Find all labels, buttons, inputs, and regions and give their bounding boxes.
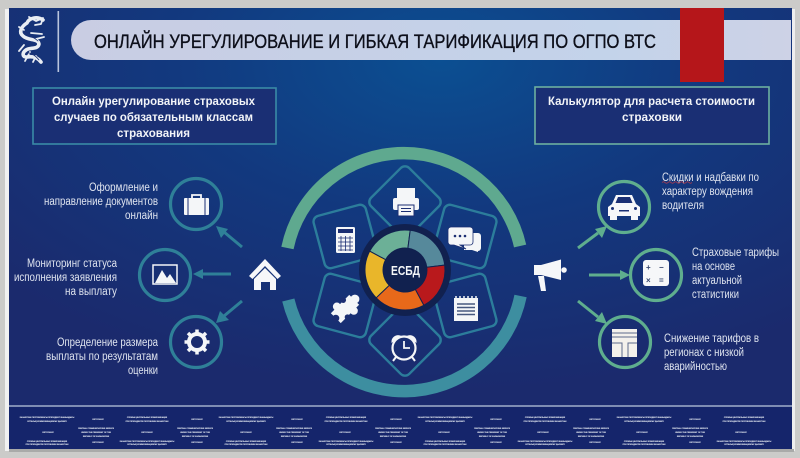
footer strip: ОРТАЛЫҚ КОММУНИКАЦИЯЛАР ҚЫЗМЕТІ: [425, 420, 465, 423]
heading box: left: страхования: [117, 126, 190, 140]
footer strip: ORTCOM.KZ: [191, 419, 204, 421]
text: monitoring: на выплату: [65, 286, 117, 298]
icon: arithmetic keypad: =: [659, 276, 664, 285]
footer strip: CENTRAL COMMUNICATIONS SERVICE: [672, 427, 709, 430]
heading box: left: [33, 88, 276, 144]
footer strip: REPUBLIC OF KAZAKHSTAN: [380, 435, 407, 438]
footer strip: REPUBLIC OF KAZAKHSTAN: [677, 435, 704, 438]
title bar: [71, 20, 791, 60]
footer strip: REPUBLIC OF KAZAKHSTAN: [479, 435, 506, 438]
footer strip: UNDER THE PRESIDENT OF THE: [81, 432, 112, 434]
text: regional reduction: регионах с низкой: [664, 347, 744, 359]
text: regional reduction: Снижение тарифов в: [664, 333, 759, 345]
footer strip: СЛУЖБА ЦЕНТРАЛЬНЫХ КОММУНИКАЦИЙ: [525, 416, 566, 419]
icon: briefcase: [170, 178, 222, 230]
footer strip: ПРИ ПРЕЗИДЕНТЕ РЕСПУБЛИКИ КАЗАХСТАН: [524, 420, 567, 423]
footer strip: CENTRAL COMMUNICATIONS SERVICE: [573, 427, 610, 430]
central donut: ЕСБД: [359, 224, 451, 316]
icon: arithmetic keypad: ×: [646, 276, 651, 285]
footer strip: ORTCOM.KZ: [537, 432, 550, 434]
footer strip: ORTCOM.KZ: [490, 419, 503, 421]
footer strip: ORTCOM.KZ: [735, 432, 748, 434]
footer strip: REPUBLIC OF KAZAKHSTAN: [578, 435, 605, 438]
footer strip: ORTCOM.KZ: [92, 419, 105, 421]
footer strip: ORTCOM.KZ: [191, 442, 204, 444]
footer strip: ORTCOM.KZ: [141, 432, 154, 434]
footer strip: СЛУЖБА ЦЕНТРАЛЬНЫХ КОММУНИКАЦИЙ: [624, 440, 665, 443]
footer strip: ORTCOM.KZ: [438, 432, 451, 434]
text: documents: направление документов: [44, 196, 158, 208]
petal diamonds: [312, 164, 498, 378]
text: discounts: характеру вождения: [662, 186, 753, 198]
arrow: house to picture: [193, 269, 231, 279]
footer strip: ПРИ ПРЕЗИДЕНТЕ РЕСПУБЛИКИ КАЗАХСТАН: [225, 443, 268, 446]
text: monitoring: [14, 258, 118, 298]
footer strip: СЛУЖБА ЦЕНТРАЛЬНЫХ КОММУНИКАЦИЙ: [226, 440, 267, 443]
footer strip: ОРТАЛЫҚ КОММУНИКАЦИЯЛАР ҚЫЗМЕТІ: [525, 443, 565, 446]
footer strip: ORTCOM.KZ: [689, 419, 702, 421]
footer strip: REPUBLIC OF KAZAKHSTAN: [83, 435, 110, 438]
text: documents: Оформление и: [89, 182, 158, 194]
text: tariffs: [692, 247, 779, 301]
footer strip: ПРИ ПРЕЗИДЕНТЕ РЕСПУБЛИКИ КАЗАХСТАН: [325, 420, 368, 423]
arrow: house to gear: [216, 301, 242, 323]
text: tariffs: актуальной: [692, 275, 742, 287]
text: payout amount: Определение размера: [57, 337, 159, 349]
footer strip: ORTCOM.KZ: [636, 432, 649, 434]
footer strip: UNDER THE PRESIDENT OF THE: [279, 432, 310, 434]
footer strip: СЛУЖБА ЦЕНТРАЛЬНЫХ КОММУНИКАЦИЙ: [127, 416, 168, 419]
logo: dragon emblem: [19, 17, 44, 62]
segment: slate: [408, 230, 445, 267]
heading box: right: [535, 87, 769, 144]
icon: house: [249, 259, 281, 290]
footer strip: ОРТАЛЫҚ КОММУНИКАЦИЯЛАР ҚЫЗМЕТІ: [624, 420, 664, 423]
footer strip: ПРИ ПРЕЗИДЕНТЕ РЕСПУБЛИКИ КАЗАХСТАН: [126, 420, 169, 423]
footer strip: ОРТАЛЫҚ КОММУНИКАЦИЯЛАР ҚЫЗМЕТІ: [27, 420, 67, 423]
text: documents: онлайн: [125, 210, 158, 222]
text: payout amount: выплаты по результатам: [46, 351, 158, 363]
footer strip: ОРТАЛЫҚ КОММУНИКАЦИЯЛАР ҚЫЗМЕТІ: [127, 443, 167, 446]
item: calculator tariffs: [630, 247, 779, 301]
icon: megaphone: [534, 260, 567, 291]
icon: chat bubbles: [448, 227, 481, 252]
footer strip: ORTCOM.KZ: [291, 419, 304, 421]
arrow: house to briefcase: [216, 226, 242, 247]
footer strip: ПРИ ПРЕЗИДЕНТЕ РЕСПУБЛИКИ КАЗАХСТАН: [723, 420, 766, 423]
item: briefcase: [44, 178, 222, 230]
arrow: megaphone to calculator: [589, 270, 630, 280]
footer strip: UNDER THE PRESIDENT OF THE: [378, 432, 409, 434]
text: discounts: водителя: [662, 200, 704, 212]
icon: puzzle piece: [325, 288, 366, 329]
footer strip: ORTCOM.KZ: [390, 442, 403, 444]
heading box: right: Калькулятор для расчета стоимости: [548, 94, 755, 108]
footer strip: CENTRAL COMMUNICATIONS SERVICE: [78, 427, 115, 430]
outer ring: bottom arc: [288, 296, 521, 391]
heading box: right: страховки: [622, 110, 682, 124]
footer strip: REPUBLIC OF KAZAKHSTAN: [182, 435, 209, 438]
footer strip: ORTCOM.KZ: [339, 432, 352, 434]
text: regional reduction: аварийностью: [664, 361, 727, 373]
item: car: [598, 172, 759, 232]
footer strip: UNDER THE PRESIDENT OF THE: [477, 432, 508, 434]
text: payout amount: [46, 337, 159, 377]
footer strip: КАЗАХСТАН РЕСПУБЛИКАСЫ ПРЕЗИДЕНТІ ЖАНЫНДАҒЫ: [219, 416, 273, 419]
icon: calculator: [336, 227, 355, 253]
icon: alarm clock: [392, 336, 416, 361]
icon: arithmetic keypad: [630, 250, 682, 300]
segment: orange: [376, 285, 424, 310]
icon: gear: [170, 316, 222, 368]
footer strip: КАЗАХСТАН РЕСПУБЛИКАСЫ ПРЕЗИДЕНТІ ЖАНЫНДАҒЫ: [717, 440, 771, 443]
footer strip: ORTCOM.KZ: [92, 442, 105, 444]
footer strip: CENTRAL COMMUNICATIONS SERVICE: [276, 427, 313, 430]
arrow: megaphone to car: [578, 226, 607, 248]
outer ring: top arc: [287, 153, 520, 248]
arrow: megaphone to road sign: [578, 301, 607, 324]
footer strip: КАЗАХСТАН РЕСПУБЛИКАСЫ ПРЕЗИДЕНТІ ЖАНЫНДАҒЫ: [518, 440, 572, 443]
text: monitoring: исполнения заявления: [14, 272, 117, 284]
footer strip: [9, 405, 792, 449]
title: ОНЛАЙН УРЕГУЛИРОВАНИЕ И ГИБКАЯ ТАРИФИКАЦИЯ ПО ОГПО ВТС: [94, 29, 656, 53]
footer strip: UNDER THE PRESIDENT OF THE: [576, 432, 607, 434]
footer strip: ORTCOM.KZ: [42, 432, 55, 434]
text: regional reduction: [664, 333, 759, 373]
segment: red: [415, 265, 445, 305]
footer strip: КАЗАХСТАН РЕСПУБЛИКАСЫ ПРЕЗИДЕНТІ ЖАНЫНДАҒЫ: [617, 416, 671, 419]
footer strip: ORTCOM.KZ: [589, 419, 602, 421]
footer strip: ORTCOM.KZ: [240, 432, 253, 434]
footer strip: СЛУЖБА ЦЕНТРАЛЬНЫХ КОММУНИКАЦИЙ: [425, 440, 466, 443]
text: tariffs: статистики: [692, 289, 739, 301]
icon: picture: [140, 250, 190, 300]
icon: arithmetic keypad: −: [659, 263, 664, 272]
text: tariffs: Страховые тарифы: [692, 247, 779, 259]
footer strip: ОРТАЛЫҚ КОММУНИКАЦИЯЛАР ҚЫЗМЕТІ: [724, 443, 764, 446]
footer strip: ПРИ ПРЕЗИДЕНТЕ РЕСПУБЛИКИ КАЗАХСТАН: [424, 443, 467, 446]
footer strip: ORTCOM.KZ: [589, 442, 602, 444]
item: gear: [46, 316, 222, 377]
logo divider: [58, 11, 59, 72]
text: payout amount: оценки: [128, 365, 158, 377]
text: tariffs: на основе: [692, 261, 735, 273]
footer strip: UNDER THE PRESIDENT OF THE: [180, 432, 211, 434]
footer strip: REPUBLIC OF KAZAKHSTAN: [281, 435, 308, 438]
item: picture: [14, 250, 190, 300]
icon: arithmetic keypad: +: [646, 263, 651, 272]
footer strip: ORTCOM.KZ: [390, 419, 403, 421]
footer strip: CENTRAL COMMUNICATIONS SERVICE: [375, 427, 412, 430]
footer strip: ORTCOM.KZ: [689, 442, 702, 444]
text: discounts: [662, 172, 759, 212]
icon: printer: [393, 188, 419, 216]
footer strip: CENTRAL COMMUNICATIONS SERVICE: [177, 427, 214, 430]
footer strip: СЛУЖБА ЦЕНТРАЛЬНЫХ КОММУНИКАЦИЙ: [326, 416, 367, 419]
footer strip: UNDER THE PRESIDENT OF THE: [675, 432, 706, 434]
footer strip: КАЗАХСТАН РЕСПУБЛИКАСЫ ПРЕЗИДЕНТІ ЖАНЫНДАҒЫ: [319, 440, 373, 443]
footer strip: ПРИ ПРЕЗИДЕНТЕ РЕСПУБЛИКИ КАЗАХСТАН: [623, 443, 666, 446]
footer strip: ПРИ ПРЕЗИДЕНТЕ РЕСПУБЛИКИ КАЗАХСТАН: [26, 443, 69, 446]
footer strip: СЛУЖБА ЦЕНТРАЛЬНЫХ КОММУНИКАЦИЙ: [27, 440, 68, 443]
footer strip: КАЗАХСТАН РЕСПУБЛИКАСЫ ПРЕЗИДЕНТІ ЖАНЫНДАҒЫ: [120, 440, 174, 443]
footer strip: ОРТАЛЫҚ КОММУНИКАЦИЯЛАР ҚЫЗМЕТІ: [326, 443, 366, 446]
icon: road sign: [600, 316, 650, 368]
text: discounts: Скидки и надбавки по: [662, 172, 759, 184]
text: documents: [44, 182, 158, 222]
footer strip: ОРТАЛЫҚ КОММУНИКАЦИЯЛАР ҚЫЗМЕТІ: [226, 420, 266, 423]
segment: yellow: [365, 251, 389, 298]
footer strip: КАЗАХСТАН РЕСПУБЛИКАСЫ ПРЕЗИДЕНТІ ЖАНЫНДАҒЫ: [418, 416, 472, 419]
item: regional tariffs: [600, 316, 759, 373]
footer strip: ORTCOM.KZ: [291, 442, 304, 444]
footer strip: ORTCOM.KZ: [490, 442, 503, 444]
heading box: left: случаев по обязательным классам: [54, 110, 253, 124]
red accent block: [680, 8, 724, 82]
footer strip: КАЗАХСТАН РЕСПУБЛИКАСЫ ПРЕЗИДЕНТІ ЖАНЫНДАҒЫ: [20, 416, 74, 419]
segment: green: [370, 230, 410, 260]
footer strip: СЛУЖБА ЦЕНТРАЛЬНЫХ КОММУНИКАЦИЙ: [724, 416, 765, 419]
icon: car: [598, 182, 650, 232]
text: monitoring: Мониторинг статуса: [27, 258, 118, 270]
heading box: left: Онлайн урегулирование страховых: [52, 94, 255, 108]
footer strip: CENTRAL COMMUNICATIONS SERVICE: [474, 427, 511, 430]
donut label: ЕСБД: [391, 264, 420, 278]
icon: notepad: [454, 296, 478, 321]
